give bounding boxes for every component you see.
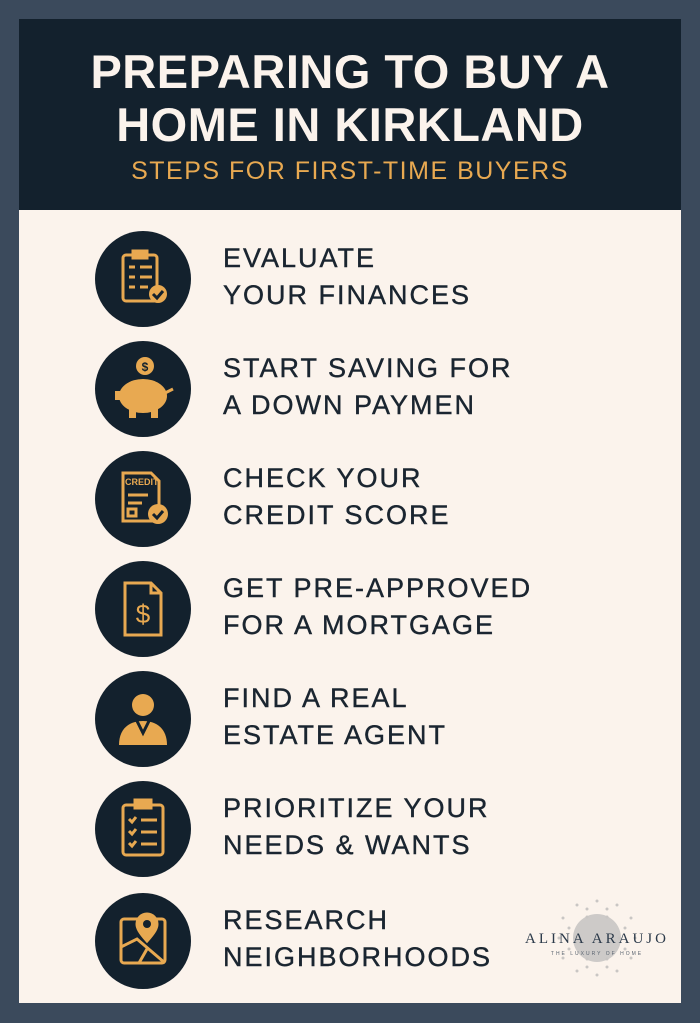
label: NEEDS & WANTS [223, 830, 472, 860]
icon: credit report [95, 451, 191, 547]
icon: agent [95, 671, 191, 767]
label: RESEARCH [223, 905, 389, 935]
step 3 [95, 451, 451, 547]
label [223, 243, 471, 310]
logo: THE LUXURY OF HOME [551, 951, 643, 957]
label: FIND A REAL [223, 683, 409, 713]
label: GET PRE-APPROVED [223, 573, 532, 603]
icon: checklist [95, 781, 191, 877]
header [19, 19, 681, 210]
icon: map pin [95, 893, 191, 989]
logo [525, 900, 669, 976]
logo: ALINA ARAUJO [525, 931, 669, 947]
step 6 [95, 781, 490, 877]
label: EVALUATE [223, 243, 376, 273]
label [223, 793, 490, 860]
label [223, 905, 492, 972]
label: YOUR FINANCES [223, 280, 471, 310]
subtitle: STEPS FOR FIRST-TIME BUYERS [131, 157, 569, 185]
icon: piggy bank [95, 341, 191, 437]
label: FOR A MORTGAGE [223, 610, 495, 640]
label: ESTATE AGENT [223, 720, 447, 750]
label [223, 573, 532, 640]
icon: credit report: CREDIT [125, 477, 159, 487]
label: CREDIT SCORE [223, 500, 451, 530]
label: PRIORITIZE YOUR [223, 793, 490, 823]
label: START SAVING FOR [223, 353, 513, 383]
icon: dollar document: $ [136, 599, 151, 629]
label: CHECK YOUR [223, 463, 423, 493]
title line 1: PREPARING TO BUY A [90, 45, 610, 98]
step 7 [95, 893, 492, 989]
step 5 [95, 671, 447, 767]
step 1 [95, 231, 471, 327]
step 2 [95, 341, 513, 437]
icon: piggy bank: $ [142, 360, 149, 374]
label [223, 463, 451, 530]
title line 2: HOME IN KIRKLAND [116, 98, 584, 151]
label: A DOWN PAYMEN [223, 390, 476, 420]
label: NEIGHBORHOODS [223, 942, 492, 972]
label [223, 683, 447, 750]
label [222, 353, 513, 420]
icon: dollar document [95, 561, 191, 657]
icon: finances clipboard [95, 231, 191, 327]
step 4 [95, 561, 532, 657]
